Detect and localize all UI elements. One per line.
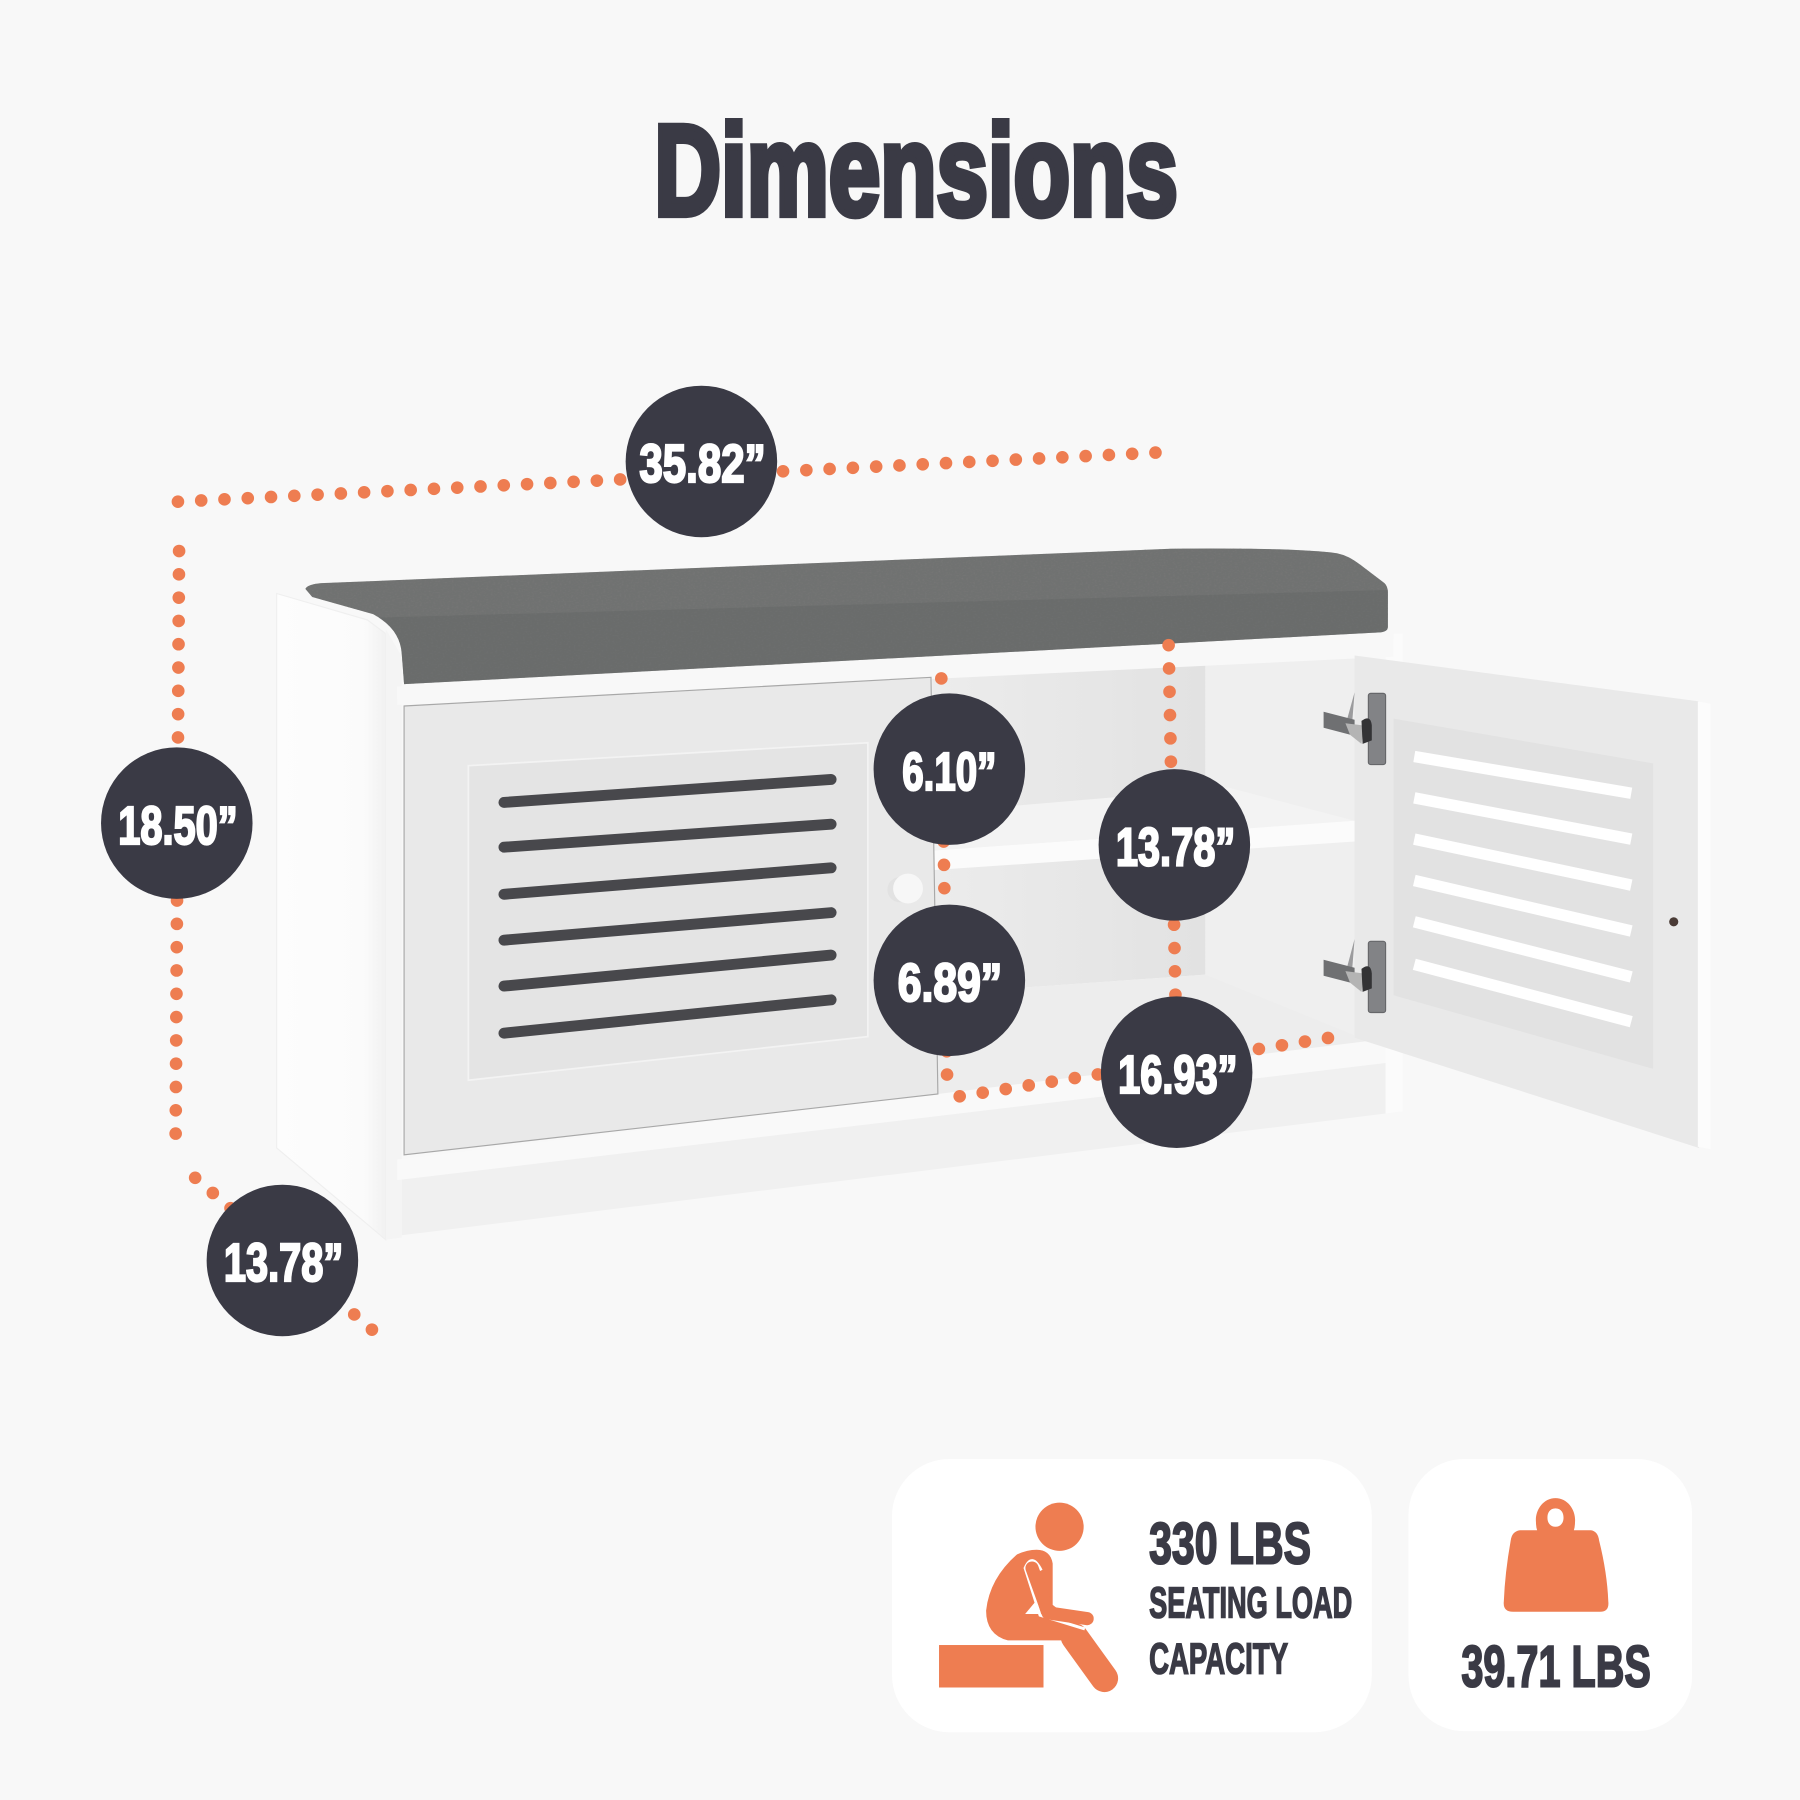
shelf	[932, 788, 1355, 870]
bottom plinth	[402, 1056, 1386, 1235]
badge: height 18.50: 18.50”	[118, 796, 238, 856]
badge: interior width 16.93	[1101, 996, 1252, 1148]
badge: depth 13.78	[207, 1185, 358, 1336]
cabinet interior side wall	[1205, 652, 1357, 1045]
badge: interior depth 13.78: 13.78”	[1116, 818, 1235, 878]
load caption line 2: CAPACITY	[1149, 1636, 1288, 1684]
badge: upper shelf 6.10	[874, 693, 1025, 845]
cabinet floor	[932, 975, 1372, 1096]
badge: interior width 16.93: 16.93”	[1118, 1045, 1238, 1105]
dotted line: interior depth	[1169, 645, 1176, 999]
badge: lower shelf 6.89	[874, 905, 1025, 1056]
icon: weight	[1504, 1498, 1608, 1612]
panel: product weight	[1409, 1459, 1692, 1731]
badge: upper shelf 6.10: 6.10”	[902, 742, 996, 802]
title: Dimensions	[654, 100, 1178, 243]
dotted line: depth	[195, 1178, 374, 1332]
badge: width 35.82: 35.82”	[639, 434, 766, 494]
product photo: shoe storage bench	[277, 549, 1710, 1240]
icon: seated person	[939, 1503, 1104, 1688]
badge: interior depth 13.78	[1099, 769, 1250, 921]
open slits	[1414, 757, 1631, 1022]
badge: height 18.50	[101, 747, 253, 899]
dotted line: width	[178, 452, 1162, 502]
top hinge	[1324, 692, 1386, 765]
door knob	[887, 874, 923, 903]
dotted line: height	[176, 551, 179, 1136]
weight value: 39.71 LBS	[1461, 1634, 1651, 1699]
seat cushion	[305, 549, 1388, 684]
badge: depth 13.78: 13.78”	[224, 1233, 343, 1293]
louvre slits	[504, 779, 831, 1033]
bench side panel	[277, 593, 386, 1240]
right side post	[1386, 634, 1403, 1114]
right open door	[1355, 655, 1710, 1149]
panel: seating load capacity	[892, 1459, 1372, 1732]
dotted line: interior width	[960, 1038, 1329, 1096]
badge: lower shelf 6.89: 6.89”	[898, 953, 1002, 1013]
left door	[404, 677, 938, 1155]
badge: width 35.82	[626, 386, 777, 537]
bottom hinge	[1324, 939, 1386, 1012]
recessed door panel	[1394, 719, 1653, 1069]
recessed louvre panel	[468, 743, 868, 1080]
dotted line: shelf heights	[941, 678, 947, 1076]
cabinet interior back wall	[932, 659, 1205, 994]
bottom rail	[397, 1039, 1386, 1180]
top front strip	[397, 633, 1394, 705]
door hole	[1669, 917, 1678, 926]
load caption line 1: SEATING LOAD	[1149, 1579, 1352, 1627]
load value: 330 LBS	[1149, 1512, 1311, 1577]
bench front post	[386, 629, 402, 1240]
